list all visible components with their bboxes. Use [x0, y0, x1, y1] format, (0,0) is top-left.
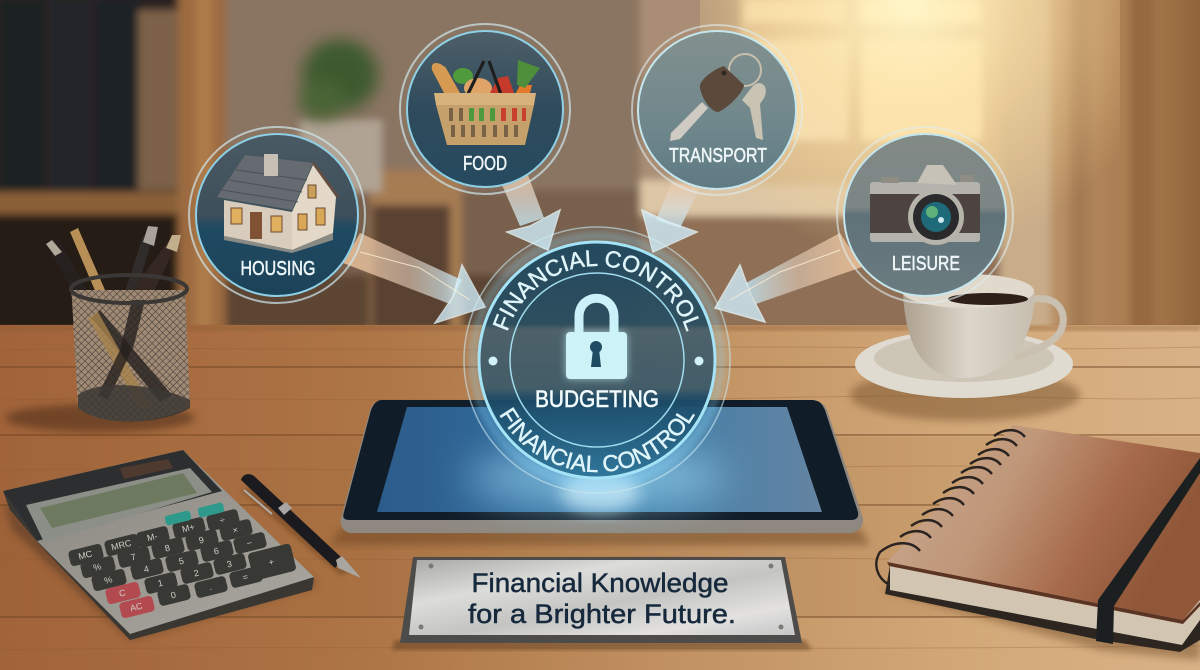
calculator: ×: [232, 525, 239, 536]
calculator: 4: [143, 564, 150, 575]
BUDGETING label: BUDGETING: [535, 386, 659, 413]
FINANCIAL CONTROL top arc: FINANCIAL CONTROL: [492, 250, 699, 332]
calculator: 9: [198, 535, 205, 546]
background: blurred room wall, shelves and window: [0, 0, 1200, 335]
calculator: [3, 450, 318, 640]
calculator: %: [92, 561, 102, 573]
calculator: 8: [164, 543, 171, 554]
calculator: MC: [77, 548, 94, 562]
calculator: −: [246, 538, 253, 549]
calculator: 2: [193, 568, 200, 579]
wooden table: [0, 325, 1200, 670]
icon: camera: [870, 165, 980, 245]
central hologram: budgeting lock: [456, 226, 734, 534]
calculator: 0: [170, 590, 177, 601]
coffee cup on saucer: [850, 274, 1080, 421]
pen holder with pens: [5, 226, 195, 432]
metal plaque: [392, 557, 812, 650]
notebook: [876, 425, 1200, 660]
calculator: 3: [226, 559, 233, 570]
arrow: leisure to centre: [715, 233, 862, 322]
calculator: C: [118, 587, 127, 599]
plaque text: [468, 568, 736, 629]
icon: grocery basket: [432, 60, 540, 145]
label: housing: HOUSING: [240, 258, 316, 280]
calculator: .: [208, 582, 213, 592]
calculator: 7: [130, 552, 137, 563]
calculator: =: [242, 572, 249, 583]
calculator: +: [268, 557, 275, 568]
calculator: M-: [146, 531, 159, 543]
category: leisure: [837, 127, 1013, 303]
calculator: M+: [181, 522, 196, 534]
FINANCIAL CONTROL bottom arc: FINANCIAL CONTROL: [500, 407, 695, 472]
label: food: FOOD: [463, 153, 507, 175]
pen: [240, 474, 361, 578]
calculator: 1: [157, 578, 164, 589]
category: housing: [189, 127, 365, 303]
plaque text: Financial Knowledge: [472, 568, 728, 598]
plaque text: for a Brighter Future.: [468, 599, 736, 629]
lock icon: [566, 298, 627, 379]
arrow: food to centre: [502, 175, 560, 250]
category: food: [400, 24, 570, 194]
icon: car keys: [670, 54, 766, 141]
label: transport: TRANSPORT: [669, 145, 767, 167]
calculator: ÷: [219, 515, 226, 526]
arrow: housing to centre: [343, 233, 485, 323]
calculator: AC: [129, 601, 144, 613]
category: transport: [632, 25, 802, 195]
calculator: 5: [178, 556, 185, 567]
calculator: 6: [213, 546, 220, 557]
arrow: transport to centre: [642, 182, 700, 252]
calculator: MRC: [110, 538, 133, 552]
icon: house: [217, 154, 338, 253]
calculator: %: [103, 574, 113, 586]
label: leisure: LEISURE: [892, 253, 960, 275]
tablet: [330, 400, 870, 545]
